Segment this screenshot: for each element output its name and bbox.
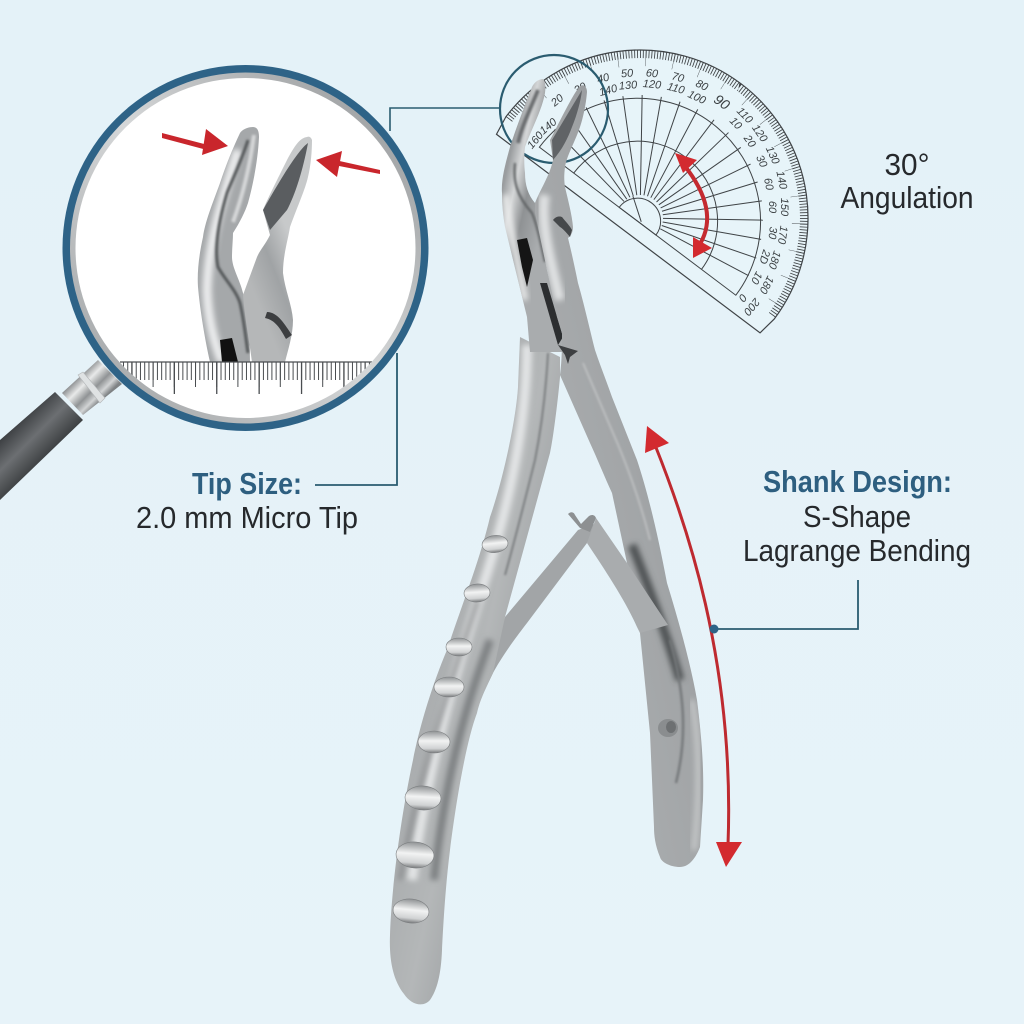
grip studs bbox=[392, 534, 509, 925]
label: shank design: S-Shape bbox=[803, 499, 911, 534]
protractor scale numbers: 2D bbox=[756, 247, 772, 265]
protractor scale numbers: 80 bbox=[694, 78, 711, 94]
shank curve arrow bbox=[645, 426, 742, 867]
left jaw window bbox=[517, 238, 533, 287]
right jaw slot bbox=[553, 216, 572, 237]
right jaw hollow bbox=[552, 90, 582, 160]
magnified left jaw bbox=[198, 127, 259, 362]
protractor scale numbers: 10 bbox=[727, 115, 745, 133]
protractor scale numbers bbox=[525, 67, 790, 318]
pivot pin bbox=[558, 345, 578, 364]
protractor scale numbers: 10 bbox=[748, 269, 764, 287]
shank leader bbox=[710, 580, 858, 634]
joint slit bbox=[540, 283, 563, 345]
protractor scale numbers: 0 bbox=[735, 291, 749, 304]
label: tip size: Tip Size: bbox=[192, 466, 302, 501]
protractor scale numbers: 20 bbox=[548, 92, 567, 110]
right spring leaf bbox=[587, 518, 668, 633]
rivet bbox=[658, 719, 678, 737]
protractor scale numbers: 50 bbox=[620, 67, 635, 80]
protractor scale numbers: 120 bbox=[749, 123, 770, 145]
angulation focus circle and leader bbox=[390, 55, 608, 163]
magnified right jaw bbox=[243, 137, 312, 362]
magnifier handle bbox=[0, 360, 122, 500]
right jaw and handle bbox=[535, 85, 703, 867]
protractor scale numbers: 140 bbox=[538, 116, 560, 137]
tip size leader bbox=[315, 353, 397, 485]
protractor scale numbers: 180 bbox=[756, 274, 776, 296]
label: tip size: 2.0 mm Micro Tip bbox=[136, 500, 358, 535]
protractor bbox=[494, 0, 875, 335]
protractor scale numbers: 110 bbox=[734, 105, 755, 127]
protractor scale numbers: 150 bbox=[778, 198, 790, 217]
protractor scale numbers: 60 bbox=[766, 201, 778, 214]
protractor scale numbers: 70 bbox=[670, 70, 686, 85]
protractor scale numbers: 40 bbox=[596, 71, 612, 86]
magnified right jaw slot bbox=[265, 312, 292, 339]
protractor scale numbers: 30 bbox=[753, 153, 770, 170]
magnified right jaw hollow bbox=[263, 143, 308, 230]
protractor angle arrow bbox=[675, 153, 712, 258]
protractor scale numbers: 130 bbox=[618, 79, 639, 93]
left spring leaf bbox=[480, 523, 597, 700]
protractor scale numbers: 120 bbox=[642, 78, 662, 92]
left handle bbox=[390, 337, 560, 1004]
protractor scale numbers: 30 bbox=[765, 226, 779, 241]
spring tip bbox=[568, 512, 596, 532]
protractor scale numbers: 30 bbox=[572, 80, 589, 97]
protractor scale numbers: 110 bbox=[666, 81, 687, 97]
protractor scale numbers: 90 bbox=[711, 91, 733, 113]
magnified left jaw window bbox=[220, 338, 238, 362]
label: shank design: Shank Design: bbox=[763, 464, 952, 499]
protractor scale numbers: 170 bbox=[775, 225, 789, 246]
protractor scale numbers: 100 bbox=[686, 88, 708, 107]
protractor scale numbers: 140 bbox=[773, 170, 789, 191]
left jaw bbox=[502, 79, 563, 352]
protractor scale numbers: 20 bbox=[740, 132, 758, 151]
protractor scale numbers: 180 bbox=[765, 249, 783, 271]
red arrow: right bbox=[316, 151, 380, 177]
protractor scale numbers: 140 bbox=[598, 82, 619, 99]
protractor scale numbers: 130 bbox=[763, 145, 782, 167]
label: angulation bbox=[840, 147, 974, 215]
label: shank design bbox=[743, 464, 971, 568]
magnifier lens bbox=[62, 65, 428, 431]
label: angulation: Angulation bbox=[840, 180, 974, 215]
protractor scale numbers: 60 bbox=[761, 177, 775, 192]
label: shank design: Lagrange Bending bbox=[743, 533, 971, 568]
label: tip size bbox=[136, 466, 358, 535]
protractor scale numbers: 200 bbox=[740, 295, 762, 318]
protractor scale numbers: 160 bbox=[525, 129, 547, 151]
ruler bbox=[120, 362, 372, 378]
label: angulation: 30° bbox=[884, 147, 930, 182]
protractor scale numbers: 60 bbox=[645, 67, 659, 80]
red arrow: left bbox=[162, 129, 228, 155]
forceps bbox=[390, 79, 703, 1004]
